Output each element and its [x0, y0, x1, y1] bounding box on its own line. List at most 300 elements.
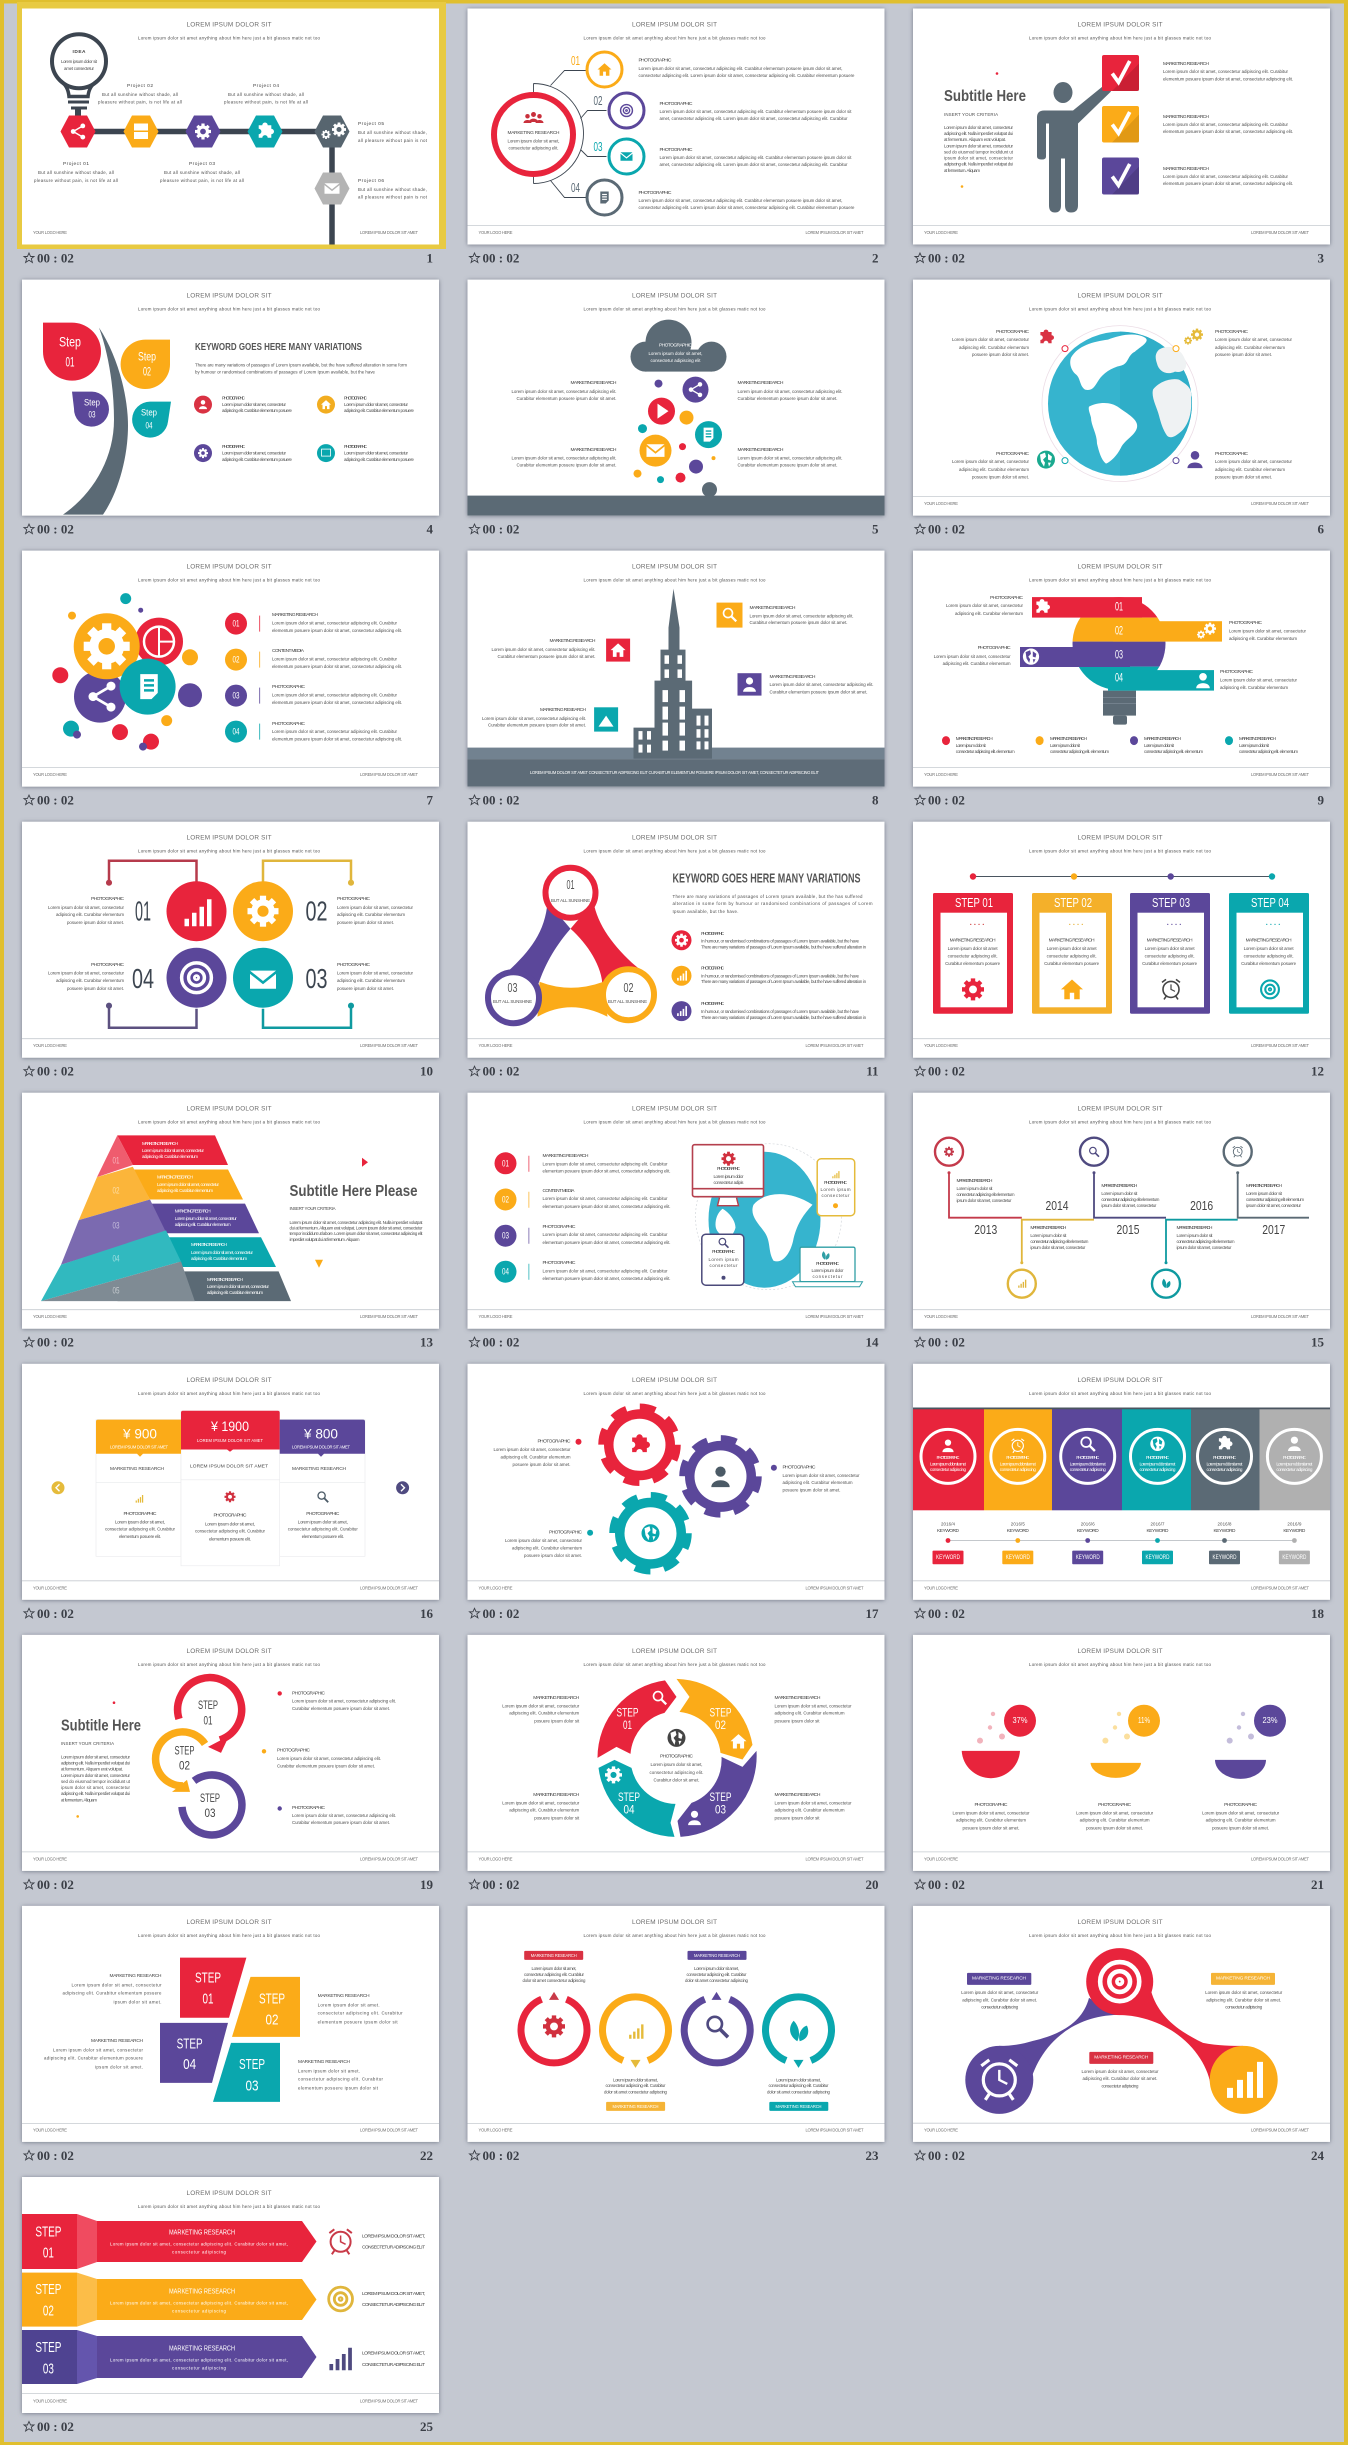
- card 3: Lorem ipsum dolor sit amet: [1145, 946, 1195, 951]
- subheading: Lorem ipsum dolor sit amet anything about him here just a bit glasses matic not too: [1029, 1933, 1212, 1938]
- texts: posuere ipsum dolor sit amet.: [67, 986, 124, 991]
- keyword heading: [672, 871, 873, 914]
- center text: consectetur adipiscing elit.: [650, 1770, 704, 1775]
- big numbers: 03: [306, 963, 328, 994]
- texts: PHOTOGRAPHIC: [996, 329, 1030, 335]
- icon items: PHOTOGRAPHIC: [222, 444, 246, 450]
- paragraphs: consectetur adipiscing elit. Curabitur: [686, 1972, 747, 1977]
- right texts: elementum posuere ipsum dolor sit amet, consectetur adipiscing elit.: [1163, 181, 1293, 186]
- paragraphs: consectetur adipiscing elit. Curabitur: [768, 2083, 829, 2088]
- caption: slide 9: 9: [1318, 793, 1324, 808]
- step texts: PHOTOGRAPHIC: [638, 58, 672, 64]
- list texts: MARKETING RESEARCH: [542, 1153, 589, 1159]
- timeline labels: KEYWORD: [1077, 1528, 1099, 1534]
- list texts: [542, 1153, 670, 1281]
- footer: YOUR LOGO HERE: [924, 2127, 958, 2132]
- subtitle block: Lorem ipsum dolor sit amet, consectetur adipiscing elit. Nulla imperdiet volutpat: [290, 1220, 423, 1225]
- circles with icons: [166, 881, 293, 1008]
- banner 2: consectetur adipiscing: [172, 2308, 227, 2314]
- label chips: MARKETING RESEARCH: [776, 2104, 822, 2109]
- side texts: CONSECTETUR ADIPISCING ELIT: [362, 2302, 425, 2308]
- caption: slide 16: 00 : 02: [37, 1606, 74, 1621]
- subtitle block: [290, 1158, 423, 1268]
- caption: slide 21: [915, 1877, 1324, 1892]
- chips: [967, 1973, 1275, 2064]
- texts: adipiscing elit. Curabitur elementum: [956, 1817, 1026, 1822]
- list texts: MARKETING RESEARCH: [272, 612, 319, 618]
- project labels: But all sunshine without shade, all: [164, 170, 240, 175]
- step texts: PHOTOGRAPHIC: [638, 190, 672, 196]
- project labels: Project 04: [253, 83, 279, 89]
- right texts: elementum posuere ipsum dolor sit amet, consectetur adipiscing elit.: [1163, 77, 1293, 82]
- texts: PHOTOGRAPHIC: [91, 896, 125, 902]
- footer: LOREM IPSUM DOLOR SIT AMET: [360, 1856, 418, 1861]
- banner 2: [22, 2273, 316, 2327]
- legend: consectetur adipiscing elit. elementum: [1050, 749, 1109, 754]
- side texts: LOREM IPSUM DOLOR SIT AMET,: [362, 2350, 425, 2356]
- heading: LOREM IPSUM DOLOR SIT: [186, 22, 272, 28]
- texts: [952, 329, 1293, 480]
- caption: slide 20: 20: [866, 1877, 878, 1892]
- side texts: MARKETING RESEARCH: [738, 447, 784, 453]
- caption: slide 20: [470, 1877, 878, 1892]
- right texts: Lorem ipsum dolor sit amet, consectetur adipiscing elit.: [292, 1698, 396, 1703]
- footer: LOREM IPSUM DOLOR SIT AMET: [1251, 1043, 1309, 1048]
- label chips: [524, 1951, 828, 2111]
- timeline texts: consectetur adipiscing elit elementum: [1246, 1197, 1304, 1202]
- list texts: PHOTOGRAPHIC: [542, 1224, 576, 1230]
- gear labels: [494, 1438, 860, 1558]
- pyramid numbers: 04: [112, 1254, 120, 1264]
- left text block: Lorem ipsum dolor sit amet, consectetur: [944, 125, 1014, 130]
- footer: YOUR LOGO HERE: [478, 230, 513, 235]
- legend: consectetur adipiscing elit. elementum: [1239, 749, 1298, 754]
- timeline texts: MARKETING RESEARCH: [1246, 1183, 1283, 1189]
- heading: LOREM IPSUM DOLOR SIT: [1078, 22, 1163, 28]
- device: tablet: [817, 1159, 855, 1216]
- subheading: Lorem ipsum dolor sit amet anything about him here just a bit glasses matic not too: [584, 307, 766, 312]
- texts: Lorem ipsum dolor sit amet, consectetur: [48, 905, 125, 910]
- paragraphs: dolor sit amet consectetur adipiscing: [685, 1978, 749, 1983]
- list texts: Lorem ipsum dolor sit amet, consectetur adipiscing elit. Curabitur: [542, 1232, 668, 1237]
- step texts: Lorem ipsum dolor sit amet, consectetur adipiscing elit. Curabitur elementum posuere ipsum dolor sit: [660, 109, 852, 114]
- panel: slide 21 percent bowls: [913, 1635, 1330, 1871]
- card rows: Lorem ipsum dolor sit amet,: [298, 1519, 348, 1524]
- left text block: at fermentum. Aliquam: [944, 168, 980, 173]
- segment labels: 04: [624, 1803, 635, 1817]
- gear labels: adipiscing elit. Curabitur elementum: [500, 1454, 571, 1459]
- texts: [48, 896, 414, 991]
- card rows: consectetur adipiscing elit. Curabitur: [288, 1526, 358, 1531]
- caption: slide 3: 00 : 02: [928, 250, 965, 266]
- heading: LOREM IPSUM DOLOR SIT: [186, 1648, 272, 1655]
- pyramid numbers: [112, 1156, 120, 1296]
- footer: [913, 1581, 1330, 1590]
- block labels: 02: [266, 2011, 278, 2028]
- tree trunk: [63, 328, 128, 515]
- numbered list: [225, 613, 260, 743]
- timeline texts: MARKETING RESEARCH: [1030, 1225, 1067, 1231]
- globe: [696, 1144, 842, 1290]
- side icons: [329, 2229, 352, 2370]
- heading: LOREM IPSUM DOLOR SIT: [186, 1106, 272, 1113]
- pyramid texts: adipiscing elit. Curabitur elementum: [207, 1290, 263, 1295]
- numbered list: 03: [502, 1231, 509, 1241]
- cycle segments: [597, 1679, 757, 1837]
- caption: slide 24: 00 : 02: [928, 2148, 965, 2163]
- column texts: Lorem ipsum dolor sit amet: [1206, 1461, 1243, 1466]
- card rows: elementum posuere elit.: [119, 1534, 161, 1539]
- footer: [22, 1852, 439, 1861]
- right texts: Lorem ipsum dolor sit amet, consectetur adipiscing elit. Curabitur: [1163, 69, 1289, 74]
- timeline texts: MARKETING RESEARCH: [1101, 1183, 1138, 1189]
- column texts: PHOTOGRAPHIC: [1213, 1455, 1237, 1461]
- caption: slide 25: 00 : 02: [37, 2419, 74, 2434]
- step texts: amet, consectetur adipiscing elit. Lorem ipsum dolor sit amet, consectetur adipiscing elit. Curabitur: [660, 162, 848, 167]
- heading: LOREM IPSUM DOLOR SIT: [632, 22, 717, 28]
- texts: PHOTOGRAPHIC: [1224, 1802, 1258, 1808]
- timeline texts: Lorem ipsum dolor sit: [1101, 1191, 1138, 1196]
- ring icons: [543, 2015, 808, 2041]
- step rings: [587, 52, 644, 215]
- footer: YOUR LOGO HERE: [33, 1043, 67, 1048]
- tile texts: Curabitur elementum posuere ipsum dolor sit amet.: [488, 723, 586, 728]
- caption: slide 11: 00 : 02: [482, 1064, 519, 1079]
- right texts: PHOTOGRAPHIC: [292, 1805, 326, 1811]
- banner 2: MARKETING RESEARCH: [169, 2286, 235, 2296]
- prices: LOREM IPSUM DOLOR SIT AMET: [197, 1438, 263, 1443]
- card rows: Lorem ipsum dolor sit amet,: [205, 1521, 255, 1526]
- caption: slide 3: 3: [1318, 250, 1324, 266]
- side texts: posuere ipsum dolor sit: [774, 1718, 820, 1723]
- title and paragraph: by humour or randomised combinations of passages of Lorem Ipsum available, but the have: [195, 369, 376, 374]
- block labels: STEP: [195, 1969, 221, 1986]
- panel: slide 14 globe devices: [468, 1093, 884, 1329]
- step numbers: 01: [571, 53, 580, 68]
- idea text: IDEA: [72, 49, 86, 55]
- ring labels: [493, 877, 647, 1004]
- card 3: consectetur adipiscing elit.: [1145, 954, 1195, 959]
- corner icons: [1037, 329, 1203, 469]
- bar texts: adipiscing elit. Curabitur elementum: [1229, 636, 1297, 641]
- texts: posuere ipsum dolor sit amet.: [962, 1825, 1020, 1830]
- icon items: PHOTOGRAPHIC: [222, 396, 246, 402]
- step texts: PHOTOGRAPHIC: [660, 101, 693, 107]
- panel: slide 25 arrow banners: [22, 2177, 439, 2413]
- card rows: MARKETING RESEARCH: [292, 1466, 347, 1472]
- panel: slide 4 tree of steps: [22, 280, 439, 516]
- caption: slide 12: [915, 1064, 1324, 1079]
- ring labels: BUT ALL SUNSHINE: [493, 999, 532, 1004]
- main ring: MARKETING RESEARCH: [508, 130, 560, 136]
- ring labels: 03: [508, 980, 518, 995]
- footer: YOUR LOGO HERE: [33, 772, 67, 777]
- right texts: Curabitur elementum posuere ipsum dolor sit amet.: [292, 1820, 390, 1825]
- device: phone: [702, 1234, 744, 1285]
- texts: PHOTOGRAPHIC: [337, 962, 371, 968]
- banner 1: consectetur adipiscing: [172, 2250, 227, 2254]
- icon items: adipiscing elit. Curabitur elementum posuere: [222, 408, 293, 413]
- keyword chips: KEYWORD: [936, 1554, 960, 1561]
- caption: slide 18: 18: [1311, 1606, 1324, 1621]
- paragraphs: [522, 1966, 831, 2094]
- panel: slide 15 timeline: [913, 1093, 1330, 1329]
- side texts: MARKETING RESEARCH: [533, 1792, 580, 1798]
- prices: ¥ 1900: [210, 1418, 249, 1434]
- card rows: PHOTOGRAPHIC: [124, 1511, 157, 1517]
- percent circles: [1004, 1705, 1286, 1737]
- heading: LOREM IPSUM DOLOR SIT: [186, 835, 272, 842]
- device: laptop: PHOTOGRAPHIC: [816, 1261, 840, 1267]
- card 4: Lorem ipsum dolor sit amet: [1244, 946, 1294, 951]
- caption: slide 6: 00 : 02: [928, 522, 965, 537]
- subtitle block: ipsum dolor sit amet, consectetur: [61, 1785, 131, 1790]
- card rows: PHOTOGRAPHIC: [214, 1512, 247, 1518]
- subheading: Lorem ipsum dolor sit amet anything about him here just a bit glasses matic not too: [138, 849, 321, 854]
- icon items: Lorem ipsum dolor sit amet, consectetur: [344, 451, 409, 456]
- numbered list: 01: [232, 619, 240, 629]
- step numbers: 04: [571, 180, 580, 195]
- banner 1: STEP: [35, 2224, 61, 2240]
- subtitle block: sed do eiusmod tempor incididunt ut: [61, 1779, 131, 1784]
- tile texts: Curabitur elementum posuere ipsum dolor sit amet.: [750, 620, 848, 625]
- card 3: • • • •: [1167, 922, 1181, 927]
- column texts: [930, 1455, 1313, 1472]
- heading: LOREM IPSUM DOLOR SIT: [632, 293, 717, 300]
- card rows: consectetur adipiscing elit. Curabitur: [105, 1526, 176, 1531]
- column texts: Lorem ipsum dolor sit amet: [1140, 1461, 1176, 1466]
- side texts: LOREM IPSUM DOLOR SIT AMET,: [362, 2291, 425, 2297]
- pyramid texts: MARKETING RESEARCH: [191, 1242, 228, 1248]
- caption: slide 10: 00 : 02: [37, 1064, 74, 1079]
- footer: LOREM IPSUM DOLOR SIT AMET: [1251, 772, 1309, 777]
- side texts: Lorem ipsum dolor sit amet, consectetur: [502, 1800, 580, 1805]
- right texts: PHOTOGRAPHIC: [277, 1747, 311, 1753]
- side texts: posuere ipsum dolor sit: [534, 1815, 580, 1820]
- gear labels: adipiscing elit. Curabitur elementum: [512, 1545, 582, 1550]
- label chips: MARKETING RESEARCH: [694, 1953, 740, 1958]
- tile texts: MARKETING RESEARCH: [540, 707, 587, 713]
- card 1: MARKETING RESEARCH: [950, 938, 996, 944]
- bar texts: [934, 595, 1307, 690]
- footer: [913, 1310, 1330, 1319]
- ring labels: 02: [624, 980, 634, 995]
- footer: LOREM IPSUM DOLOR SIT AMET: [360, 1314, 418, 1319]
- paragraphs: [961, 1990, 1283, 2088]
- card 3: MARKETING RESEARCH: [1147, 938, 1193, 944]
- card 2: MARKETING RESEARCH: [1049, 938, 1095, 944]
- footer: YOUR LOGO HERE: [924, 1314, 958, 1319]
- icon tiles: [594, 603, 762, 732]
- tile texts: Curabitur elementum posuere ipsum dolor sit amet.: [770, 690, 868, 695]
- list texts: elementum posuere ipsum dolor sit amet, consectetur adipiscing elit.: [272, 628, 402, 633]
- caption: slide 17: 17: [866, 1606, 879, 1621]
- caption: slide 16: [24, 1606, 434, 1621]
- panel: slide 8 skyscraper: [468, 551, 884, 787]
- tower: [634, 589, 712, 759]
- texts: posuere ipsum dolor sit amet.: [337, 920, 394, 925]
- gear labels: posuere ipsum dolor sit amet.: [524, 1553, 582, 1558]
- numbered list: 04: [232, 727, 240, 737]
- blocks: [160, 1958, 300, 2102]
- ring labels: BUT ALL SUNSHINE: [551, 898, 590, 903]
- project labels: pleasure without pain, is not life at all: [98, 100, 182, 104]
- texts: PHOTOGRAPHIC: [996, 451, 1030, 457]
- banner 3: STEP: [35, 2339, 61, 2356]
- texts: Lorem ipsum dolor sit amet, consectetur: [48, 971, 125, 976]
- heading: LOREM IPSUM DOLOR SIT: [1078, 1106, 1163, 1113]
- list texts: elementum posuere ipsum dolor sit amet, consectetur adipiscing elit.: [272, 664, 402, 669]
- icon: person pointing: [1037, 82, 1111, 212]
- keyword chips: KEYWORD: [1006, 1554, 1030, 1561]
- icon items: Lorem ipsum dolor sit amet, consectetur: [222, 451, 287, 456]
- subheading: Lorem ipsum dolor sit amet anything about him here just a bit glasses matic not too: [1029, 1662, 1212, 1667]
- pyramid left facets: [41, 1135, 195, 1301]
- subheading: Lorem ipsum dolor sit amet anything about him here just a bit glasses matic not too: [138, 2204, 321, 2209]
- tile texts: [482, 605, 874, 728]
- column texts: consectetur adipiscing: [1000, 1467, 1036, 1472]
- timeline texts: consectetur adipiscing elit elementum: [956, 1192, 1015, 1197]
- footer: YOUR LOGO HERE: [924, 501, 958, 506]
- paragraphs: adipiscing elit. Curabitur dolor sit amet.: [1206, 1997, 1281, 2002]
- block labels: STEP: [259, 1990, 285, 2007]
- gear labels: PHOTOGRAPHIC: [538, 1438, 571, 1444]
- subheading: Lorem ipsum dolor sit amet anything about him here just a bit glasses matic not too: [138, 578, 321, 583]
- bar texts: Lorem ipsum dolor sit amet, consectetur: [946, 603, 1024, 608]
- side texts: posuere ipsum dolor sit: [534, 1718, 580, 1723]
- icon items: [194, 396, 415, 462]
- timeline texts: consectetur adipiscing elit elementum: [1101, 1197, 1160, 1202]
- center text: Lorem ipsum dolor sit amet,: [650, 1762, 702, 1767]
- texts: posuere ipsum dolor sit amet.: [972, 352, 1029, 357]
- caption: slide 10: 10: [420, 1064, 433, 1079]
- panel: slide 16 pricing: [22, 1364, 439, 1600]
- right texts: Lorem ipsum dolor sit amet, consectetur adipiscing elit. Curabitur: [1163, 122, 1289, 127]
- subtitle block: Lorem ipsum dolor sit amet, consectetur: [61, 1773, 131, 1778]
- project labels: Project 03: [189, 161, 215, 167]
- texts: adipiscing elit. Curabitur elementum posuere: [44, 2055, 144, 2060]
- footer: LOREM IPSUM DOLOR SIT AMET: [806, 1856, 864, 1861]
- list texts: elementum posuere ipsum dolor sit amet, consectetur adipiscing elit.: [542, 1276, 670, 1281]
- timeline labels: 2016/9: [1287, 1521, 1302, 1526]
- checklist boxes: [1102, 55, 1139, 194]
- badge icons: In humour, or randomised combinations of passages of Lorem Ipsum available, but the have: [701, 974, 860, 979]
- bar texts: PHOTOGRAPHIC: [1220, 669, 1254, 675]
- device: monitor: consectetur adipis: [714, 1180, 744, 1185]
- side texts: Lorem ipsum dolor sit amet, consectetur: [774, 1704, 852, 1709]
- center text: PHOTOGRAPHIC: [660, 1753, 694, 1759]
- gear labels: PHOTOGRAPHIC: [782, 1464, 816, 1470]
- pyramid texts: Lorem ipsum dolor sit amet, consectetur: [207, 1284, 270, 1289]
- heading: LOREM IPSUM DOLOR SIT: [1078, 835, 1163, 842]
- timeline labels: 2016/7: [1150, 1521, 1165, 1526]
- pyramid texts: MARKETING RESEARCH: [207, 1277, 244, 1283]
- footer: [913, 768, 1330, 777]
- list texts: PHOTOGRAPHIC: [272, 684, 306, 690]
- subtitle block: adipiscing elit. Nulla imperdiet volutpat dui: [61, 1760, 130, 1765]
- heading: LOREM IPSUM DOLOR SIT: [632, 1919, 717, 1926]
- gear labels: adipiscing elit. Curabitur elementum: [782, 1480, 853, 1485]
- list texts: PHOTOGRAPHIC: [272, 721, 306, 727]
- footer: YOUR LOGO HERE: [33, 1856, 67, 1861]
- caption: slide 4: [24, 522, 434, 537]
- panel: slide 9 light bulb bars: [913, 551, 1330, 787]
- list texts: Lorem ipsum dolor sit amet, consectetur adipiscing elit. Curabitur: [272, 693, 398, 698]
- footer: [22, 2394, 439, 2404]
- caption: slide 5: [470, 522, 879, 537]
- paragraphs: Lorem ipsum dolor sit amet, consectetur: [1082, 2069, 1159, 2074]
- paragraphs: consectetur adipiscing elit. Curabitur: [606, 2083, 666, 2088]
- banner 1: MARKETING RESEARCH: [169, 2228, 235, 2236]
- cloud: consectetur adipiscing elit: [650, 358, 701, 363]
- caption: slide 3: [915, 250, 1324, 266]
- prices: ¥ 800: [303, 1425, 338, 1441]
- panel: slide 24 arch: [913, 1906, 1330, 2142]
- bar texts: Lorem ipsum dolor sit amet, consectetur: [1220, 678, 1298, 683]
- paragraphs: Lorem ipsum dolor sit amet, consectetur: [1205, 1990, 1283, 1995]
- texts: posuere ipsum dolor sit amet.: [1215, 352, 1272, 357]
- texts: adipiscing elit. Curabitur elementum posuere: [62, 1990, 162, 1995]
- block labels: 03: [246, 2077, 258, 2094]
- card 2: • • • •: [1069, 922, 1083, 927]
- subheading: Lorem ipsum dolor sit amet anything about him here just a bit glasses matic not too: [138, 1391, 321, 1396]
- column texts: consectetur adipiscing: [1140, 1467, 1176, 1472]
- pyramid texts: Lorem ipsum dolor sit amet, consectetur: [157, 1182, 220, 1187]
- side texts: Lorem ipsum dolor sit amet, consectetur: [502, 1704, 580, 1709]
- badge icons: [672, 930, 867, 1021]
- project labels: But all sunshine without shade,: [358, 130, 427, 135]
- badge icons: PHOTOGRAPHIC: [701, 966, 725, 972]
- card 4: consectetur adipiscing elit.: [1244, 954, 1294, 959]
- paragraphs: Lorem ipsum dolor sit amet,: [776, 2077, 821, 2082]
- tile texts: Lorem ipsum dolor sit amet, consectetur adipiscing elit.: [482, 716, 586, 721]
- footer: LOREM IPSUM DOLOR SIT AMET: [1251, 1585, 1309, 1590]
- prices: ¥ 900: [122, 1425, 157, 1441]
- caption: slide 19: 00 : 02: [37, 1877, 74, 1892]
- subheading: Lorem ipsum dolor sit amet anything about him here just a bit glasses matic not too: [584, 1391, 766, 1396]
- block labels: 04: [183, 2056, 196, 2073]
- subtitle block: at fermentum. Aliquam: [61, 1797, 97, 1802]
- big numbers: 04: [132, 963, 154, 994]
- center text: [650, 1729, 704, 1782]
- left text block: Lorem ipsum dolor sit amet, consectetur: [944, 144, 1014, 148]
- column texts: consectetur adipiscing: [1206, 1467, 1243, 1472]
- step texts: PHOTOGRAPHIC: [660, 147, 693, 153]
- caption: slide 15: 00 : 02: [928, 1335, 965, 1350]
- subheading: Lorem ipsum dolor sit amet anything about him here just a bit glasses matic not too: [1029, 1391, 1212, 1396]
- project labels: Project 05: [358, 121, 384, 127]
- column texts: PHOTOGRAPHIC: [936, 1455, 960, 1461]
- footer: [22, 1039, 439, 1048]
- panel: slide 1 project hexagon path: [22, 8, 439, 244]
- project labels: But all sunshine without shade, all: [228, 92, 304, 97]
- gear labels: posuere ipsum dolor sit amet.: [512, 1462, 570, 1467]
- subtitle block: [61, 1701, 141, 1818]
- texts: adipiscing elit. Curabitur elementum: [56, 912, 124, 917]
- column texts: consectetur adipiscing: [1276, 1467, 1313, 1472]
- footer: YOUR LOGO HERE: [33, 1314, 67, 1319]
- list texts: elementum posuere ipsum dolor sit amet, consectetur adipiscing elit.: [272, 736, 402, 741]
- column texts: Lorem ipsum dolor sit amet: [1276, 1461, 1313, 1466]
- legend: Lorem ipsum dolor sit: [1050, 743, 1081, 748]
- subtitle block: Subtitle Here: [61, 1717, 141, 1734]
- cloud: Lorem ipsum dolor sit amet,: [648, 351, 702, 356]
- texts: adipiscing elit. Curabitur elementum: [1206, 1817, 1276, 1822]
- spinner links: [508, 902, 642, 1017]
- icon items: PHOTOGRAPHIC: [344, 396, 368, 402]
- icon: light bulb idea: [52, 34, 106, 119]
- keyword chips: KEYWORD: [1212, 1554, 1237, 1561]
